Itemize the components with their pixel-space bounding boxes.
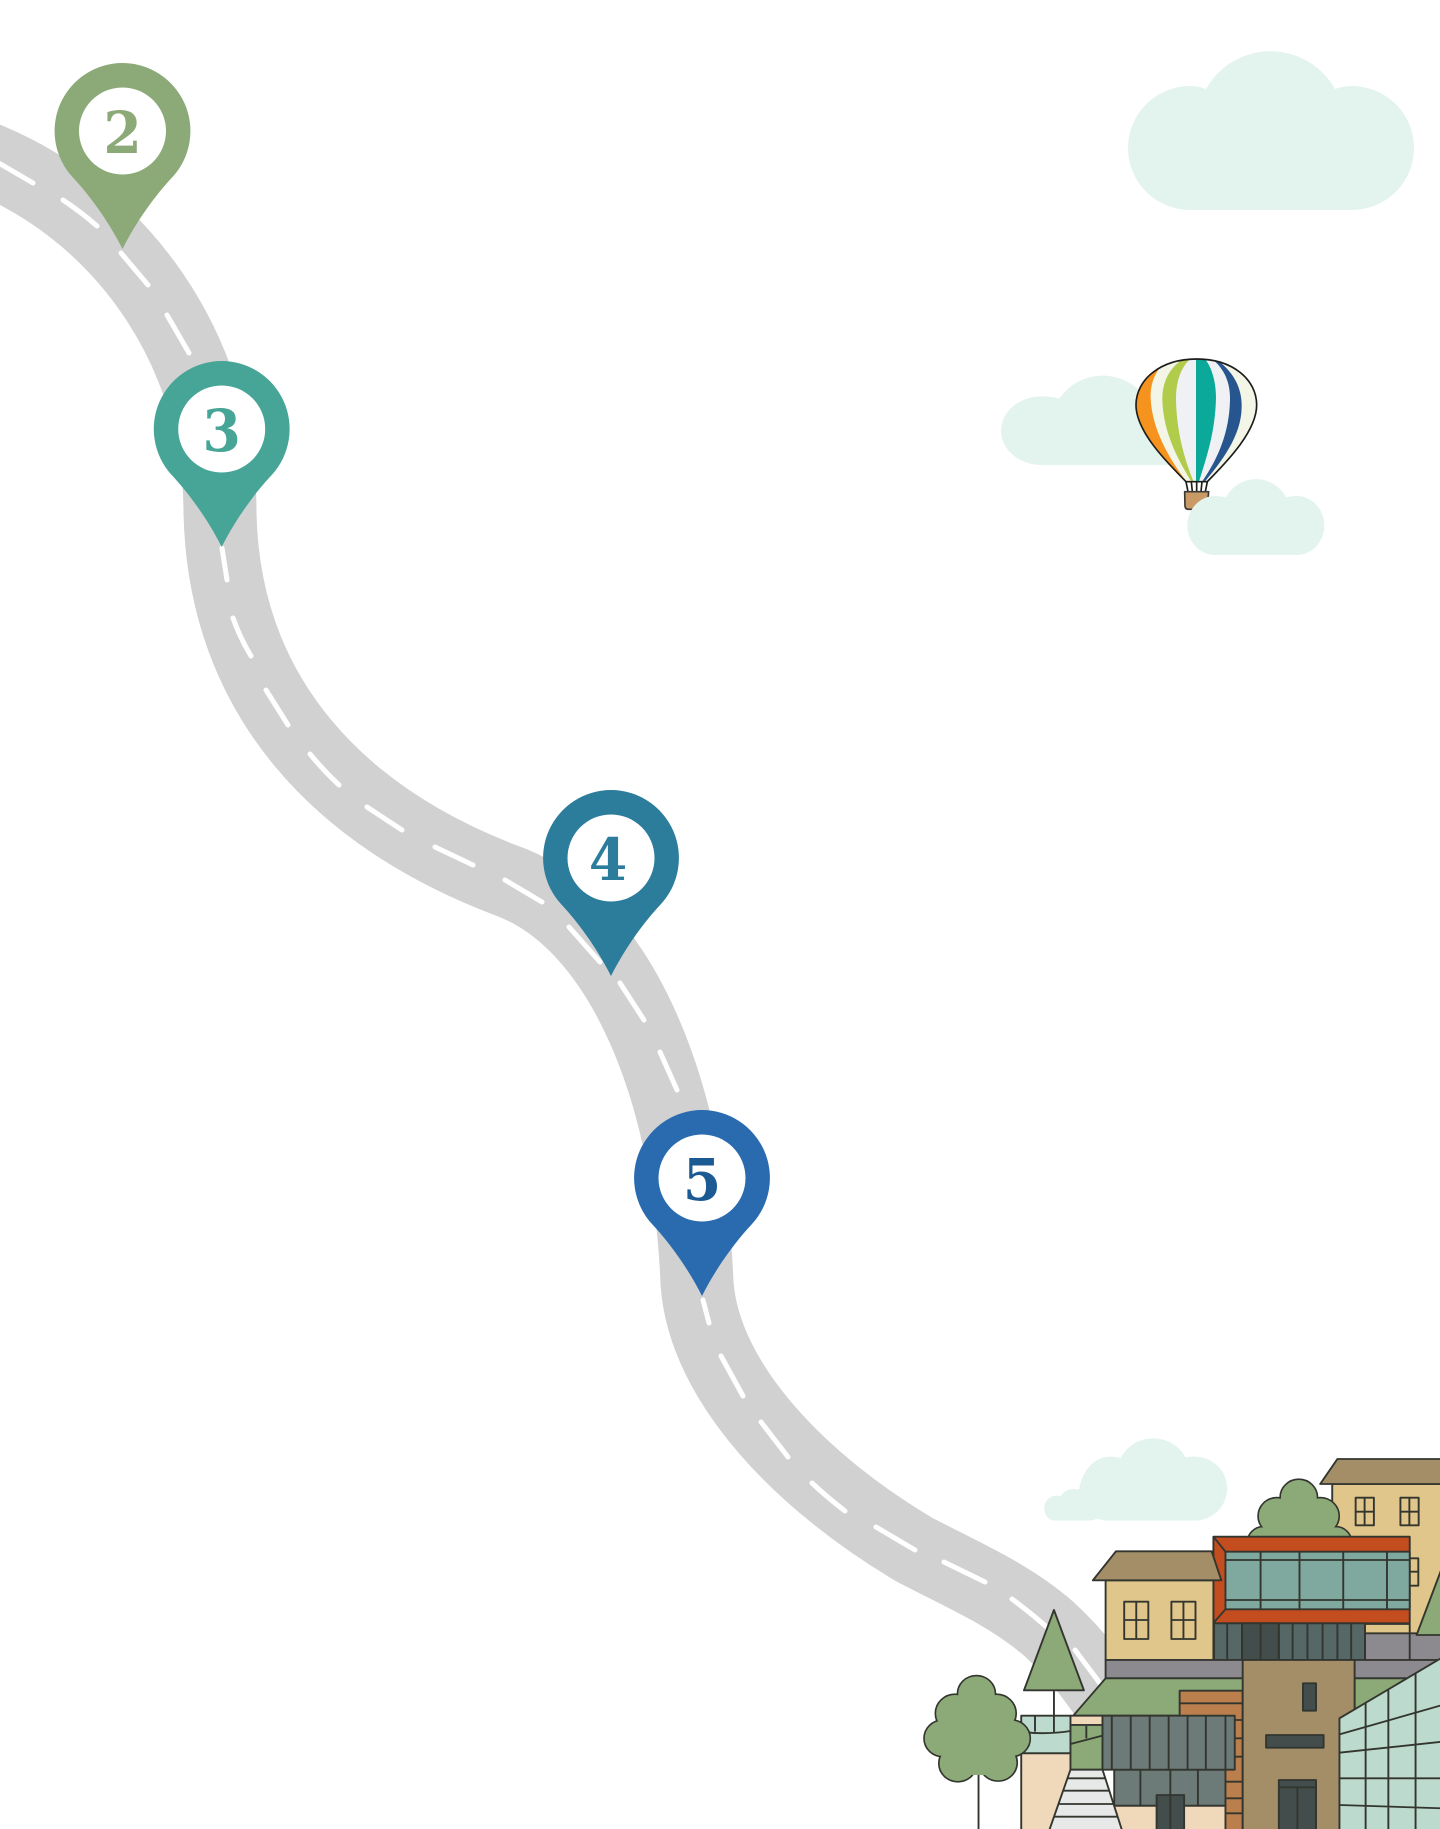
icon: hot air balloon	[1133, 357, 1260, 509]
cloud: top right	[1128, 51, 1414, 210]
pin 2	[55, 63, 190, 249]
tan tower	[1243, 1660, 1355, 1829]
cloud: in front of balloon basket	[1187, 479, 1324, 555]
dark panel under glass box	[1214, 1623, 1365, 1660]
tree: behind glass box	[1247, 1479, 1352, 1560]
building: front house	[1093, 1551, 1221, 1660]
pin 4	[543, 790, 679, 976]
pin 3	[154, 361, 290, 547]
winding road	[0, 156, 1130, 1730]
grey wall and triangle tree right	[1365, 1567, 1440, 1660]
number 4: 4	[589, 827, 627, 894]
pin 5	[634, 1110, 770, 1296]
building: back right house	[1320, 1459, 1440, 1637]
building: red glass box	[1213, 1537, 1410, 1623]
glass building right	[1339, 1657, 1440, 1829]
number 3: 3	[203, 398, 241, 465]
dark clad block	[1103, 1716, 1235, 1829]
left terrace: glass rail and beige wall	[1021, 1716, 1103, 1829]
cloud: behind balloon	[1001, 376, 1177, 465]
town scene	[924, 1438, 1440, 1829]
triangle tree	[1024, 1610, 1084, 1716]
grey band	[1106, 1660, 1440, 1678]
round tree	[924, 1676, 1030, 1829]
road centre dashes	[0, 162, 1105, 1690]
balloon scene with clouds	[1001, 357, 1324, 555]
green slopes	[1073, 1678, 1410, 1716]
number 2: 2	[103, 100, 142, 167]
road surface	[0, 156, 1130, 1730]
cloud: above town	[1044, 1438, 1227, 1521]
number 5: 5	[683, 1147, 721, 1214]
brick wall	[1180, 1691, 1243, 1829]
stairs	[1049, 1770, 1122, 1829]
